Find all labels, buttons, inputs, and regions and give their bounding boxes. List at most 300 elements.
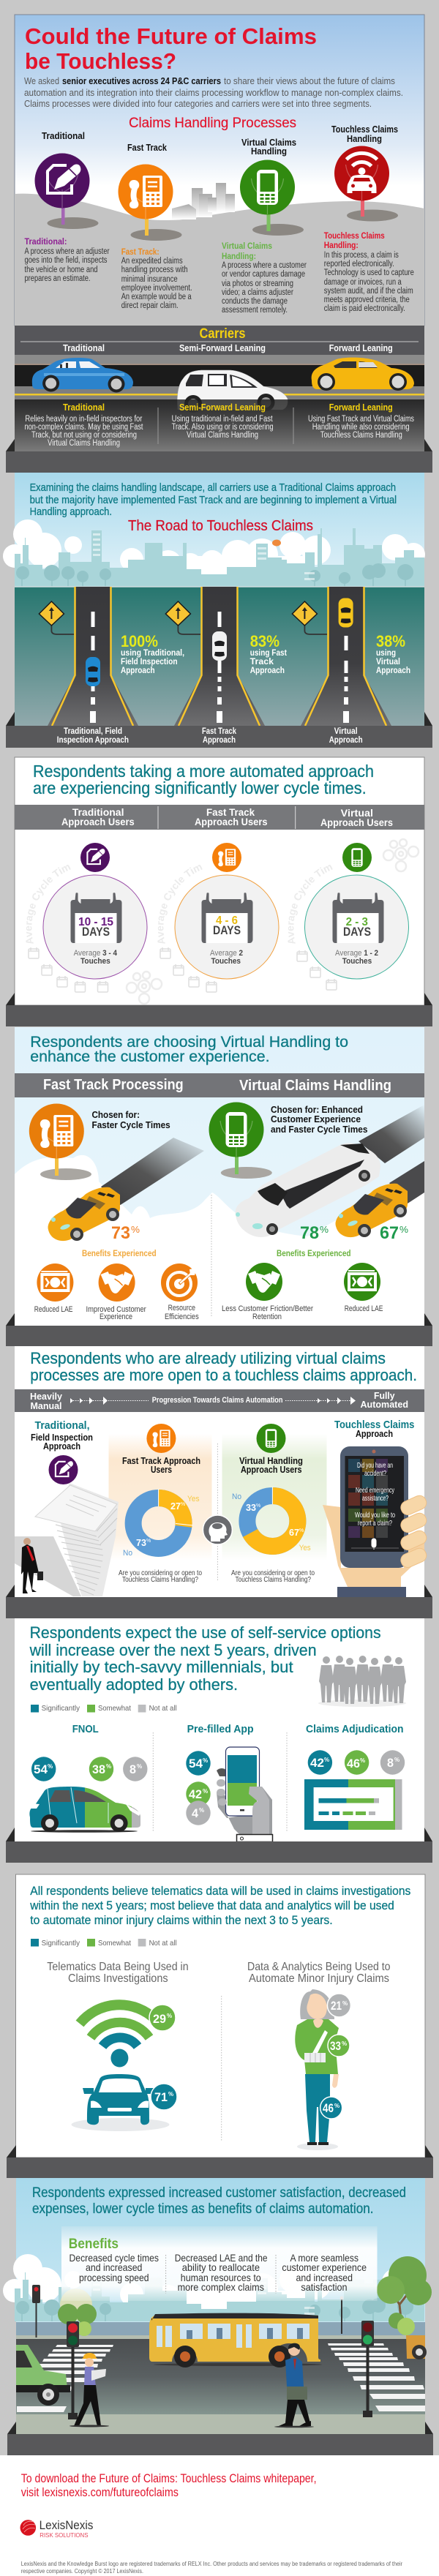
virtual users label: Virtual Handling [239,1455,303,1466]
donut: virtual: 33 [246,1502,256,1513]
definition: touchless claims handling: Technology is used to capture [324,269,414,277]
yellow vehicle right [406,2335,427,2359]
semi-forward leaning description: Semi-Forward Leaning [179,402,266,413]
panel: cycle times [15,756,424,1005]
icon: fast track [146,1424,176,1453]
process names: Fast Track [127,142,168,153]
road: fast track [101,1138,204,1205]
column header band: Traditional [72,806,124,818]
heading: open to touchless [30,1349,417,1384]
traditional carrier description: Virtual Claims Handling [48,439,120,448]
question: virtual [231,1569,315,1584]
stat: 100 percent: Field Inspection [121,656,178,666]
column: traditional users: Average 3 - 4 [74,949,118,958]
benefit column 3: customer experience [282,2261,367,2273]
process names: Handling [251,146,287,157]
heading: cycle times [33,762,374,797]
donut: virtual: No [232,1492,241,1501]
chart title: analytics [247,1961,391,1985]
FNOL car [28,1785,142,1833]
header band: Fast Track Processing [43,1077,184,1093]
carriers heading: Carriers [199,326,246,342]
benefit: reduced LAE [344,1263,383,1313]
yellow bus [149,2313,322,2367]
benefit column 3 [282,2252,367,2293]
footer background [0,2455,439,2576]
download call to action [21,2472,316,2499]
stat: 21 percent: % [342,2000,348,2007]
intro text: Claims processes were divided into four categories and carriers were set into three segments. [24,98,372,109]
touchless approach label: Touchless Claims [334,1419,414,1431]
legend: Not at all [149,1704,177,1713]
question: virtual: Are you considering or open to [231,1569,315,1577]
chosen for: fast track [92,1109,170,1130]
stat: 73 percent: % [131,1224,140,1235]
column: virtual users: 2 - 3 [346,916,368,928]
column header band [15,805,424,830]
shelf band 4 [6,1313,432,1346]
heading: cycle times: Respondents taking a more automated approach [33,762,374,781]
stat: 38 percent [376,632,410,675]
definition: fast track: Fast Track: [121,247,160,257]
definition: traditional: Traditional: [25,236,67,247]
intro text: automation and its integration into their claims processing workflow to manage non-complex claims. [24,87,403,98]
column header band: Fast Track [206,806,255,818]
pre-filled app stats: 42 [189,1787,202,1801]
forward leaning description [308,402,414,440]
column: virtual users: Average 1 - 2 [335,949,378,958]
stat: 71 percent [151,2084,177,2110]
pre-filled app stats: % [203,1757,208,1764]
carrier labels: Semi-Forward Leaning [179,342,266,353]
progression band [15,1389,424,1412]
paper stack [35,1483,119,1596]
definition: traditional: prepares an estimate. [25,274,91,283]
heading: customer experience: enhance the customer experience. [30,1048,270,1065]
definition: fast track: An expedited claims [121,257,183,266]
FNOL stats: 8 [130,1762,136,1776]
blue car top view [86,657,100,686]
yellow car top view [339,598,353,628]
icon: virtual [256,1424,285,1453]
road strip [15,355,424,399]
ground [15,587,424,726]
dotted divider [217,1443,218,1580]
panel: benefits street scene [3,2178,432,2434]
legend: Significantly [42,1939,80,1948]
FNOL stats: % [106,1763,111,1770]
chosen for: fast track: Faster Cycle Times [92,1119,170,1130]
semi-forward leaning description: Virtual Claims Handling [187,431,258,440]
sports car: fast track [48,1187,120,1241]
benefit column 3: satisfaction [301,2281,348,2293]
definition: traditional: the vehicle or home and [25,266,98,274]
shelf band 2 with road labels: Fast Track [202,727,236,736]
forward leaning description: Using Fast Track and Virtual Claims [308,415,414,424]
traditional label: Field Inspection [31,1432,93,1443]
pin: traditional [35,154,98,229]
logo: LexisNexis Risk Solutions [20,2518,93,2539]
download call to action: To download the Future of Claims: Touchless Claims whitepaper, [21,2472,316,2485]
signs [39,601,327,634]
column: fast track users: 4 - 6 [216,915,238,927]
shelf band 2 with road labels: Virtual [334,727,358,736]
intro paragraph [30,482,397,518]
benefits label: fast track: Benefits Experienced [82,1248,157,1258]
column titles [72,1723,403,1735]
stat: 33 percent [328,2035,350,2057]
claims adjudication stats: 46 [347,1757,360,1770]
title [25,23,317,74]
definition: fast track: minimal insurance [121,275,178,284]
stat: 83 percent: Track [250,656,274,666]
dotted divider [211,1195,212,1317]
stat: 46 percent: 46 [323,2101,334,2115]
stat: 33 percent: % [342,2040,347,2047]
column: traditional users: Touches [80,957,110,966]
column: fast track users: Touches [211,957,241,966]
claims adjudication stats: % [394,1757,399,1763]
question: fast track: Touchless Claims Handling? [122,1575,198,1584]
panel: self-service [15,1618,424,1842]
shelf band 2 with road labels: Approach [329,736,363,745]
traditional carrier description [25,402,143,448]
heading: open to touchless: Respondents who are already utilizing virtual claims [30,1349,386,1367]
road 1 [48,587,138,726]
decorative cycle-time labels [26,865,332,944]
heading: customer experience [30,1033,348,1065]
traditional carrier description: Traditional [63,402,105,413]
stat: 71 percent: 71 [154,2090,168,2104]
donut: fast track: 73 [136,1537,146,1548]
panel: claims handling processes [15,15,424,326]
touchless approach label: Approach [356,1428,393,1439]
white car top view [212,631,227,661]
icon: traditional [48,1455,78,1484]
pedestrian signal left [67,2321,79,2419]
heading: benefits: expenses, lower cycle times as benefits of claims automation. [32,2201,373,2217]
benefit: less customer friction [222,1263,313,1321]
definition: touchless claims handling: Handling: [324,240,359,250]
shelf band 2 with road labels: Inspection Approach [57,736,129,745]
stat: 67 percent [380,1223,408,1243]
chart title: telematics [47,1961,189,1985]
shelf band 8 [7,2422,433,2455]
stat: 46 percent: % [334,2103,339,2109]
stat: 67 percent: 67 [380,1223,399,1243]
stat: 38 percent: Approach [376,665,410,675]
pedestrian signal right [361,2321,374,2417]
progression band: Manual [31,1400,61,1411]
stat: 78 percent [300,1223,329,1243]
limousine [236,1143,380,1237]
donut: fast track: No [123,1549,132,1558]
column titles: Claims Adjudication [306,1723,404,1735]
benefit column 2: human resources to [181,2272,261,2283]
heading: telematics: within the next 5 years; most believe that data and analytics will be used [29,1899,394,1912]
definition: touchless claims handling [324,230,414,313]
heading: self-service: eventually adopted by others. [30,1675,238,1694]
small calendars and gears [29,839,419,1004]
sports car: virtual [336,1184,408,1237]
benefit: resource efficiencies: Resource [168,1304,195,1313]
pin: touchless claims handling [334,146,398,221]
definition: virtual claims handling: conducts the damage [222,297,288,306]
intro text: senior executives across 24 P&C carriers [62,75,221,86]
FNOL stats: % [137,1763,142,1770]
panel: open to touchless [15,1346,429,1597]
chart title: telematics: Telematics Data Being Used in [47,1961,189,1973]
benefit column 1: and increased [86,2261,142,2273]
title: Could the Future of Claims [25,23,317,49]
column header band: Approach Users [61,816,135,827]
definition: virtual claims handling: Virtual Claims [222,241,272,251]
shelf band 2 with road labels [6,712,432,748]
heading: self-service: initially by tech-savvy millennials, but [30,1658,293,1676]
semi-forward leaning description: Using traditional in-field and Fast [172,415,273,424]
legal text [21,2561,402,2575]
benefit: resource efficiencies: Efficiencies [165,1313,199,1321]
benefit column 2: more complex claims [178,2281,264,2293]
benefits title: Benefits [69,2237,119,2252]
FNOL stats: 54 [34,1762,48,1776]
pre-filled app stats: 4 [192,1806,199,1820]
hand holding phone: Need emergency [356,1486,394,1495]
forward leaning description: Handling while also considering [312,423,410,432]
clouds and city [3,2254,425,2321]
title: be Touchless? [25,48,176,74]
carrier descriptions panel [15,399,424,451]
distant buildings [172,183,235,219]
definition: touchless claims handling: reported electronically. [324,260,394,269]
heading: telematics: All respondents believe telematics data will be used in claims investigations [30,1885,410,1898]
intro paragraph: but the majority have implemented Fast Track and are beginning to implement a Virtual [30,495,397,506]
stat: 38 percent: using [376,647,396,658]
right tree [377,2256,432,2335]
pre-filled app stats: % [203,1788,208,1795]
legend [31,1704,177,1713]
businessman walking [274,2343,314,2427]
claims adjudication stats: 8 [387,1756,394,1770]
column: virtual users: DAYS [343,925,371,939]
clouds [3,519,425,577]
stat: 83 percent: Approach [250,665,285,675]
businessman [21,1538,43,1593]
pre-filled app phone and hand [217,1747,272,1842]
yellow sports car [312,358,414,391]
FNOL stats: 38 [92,1762,105,1776]
right crosswalk [328,2343,425,2411]
far traffic light and lamp post [32,2285,344,2337]
chart title: analytics: Data & Analytics Being Used to [247,1961,391,1973]
heading: customer experience: Respondents are choosing Virtual Handling to [30,1033,348,1051]
chosen for: virtual: and Faster Cycle Times [271,1124,367,1135]
definition: fast track: direct repair claim. [121,301,179,310]
benefit: less customer friction: Retention [252,1313,282,1321]
legend: Not at all [149,1939,177,1948]
donut: virtual: % [299,1528,304,1533]
benefit column 2: Decreased LAE and the [175,2252,268,2264]
column: virtual users [304,843,408,979]
heading: telematics: to automate minor injury claims within the next 3 to 5 years. [30,1914,333,1927]
stat: 21 percent: 21 [331,1999,342,2013]
clouds [15,1155,424,1326]
definition: virtual claims handling: assessment remotely. [222,306,288,315]
panel: carriers [15,326,424,451]
stat: 83 percent: 83% [250,632,279,650]
claims adjudication stats [308,1750,405,1775]
column: traditional users: 10 - 15 [78,916,113,928]
definition: fast track: employee involvement. [121,284,192,293]
definition: virtual claims handling: video; a claims adjuster [222,288,293,297]
benefit: resource efficiencies [161,1263,199,1321]
left tree [58,2288,97,2336]
definition: fast track: handling process with [121,266,188,274]
stat: 100 percent: using Traditional, [121,647,184,658]
definition: traditional [25,236,110,283]
donut: virtual [232,1487,311,1552]
stat: 73 percent [111,1223,140,1243]
fast track users label: Fast Track Approach [122,1455,200,1466]
traditional carrier description: Relies heavily on in-field inspectors for [25,415,143,424]
chosen for: virtual [271,1104,367,1135]
benefit: improved customer experience [86,1263,146,1321]
road 2 [174,587,265,726]
legend: Somewhat [98,1704,131,1713]
forward leaning description: Touchless Claims Handling [320,431,402,440]
stat: 29 percent: 29 [153,2012,166,2026]
definition: touchless claims handling: meets approved criteria, the [324,296,410,304]
white minivan [177,370,288,413]
hand holding phone: report a claim? [358,1519,392,1528]
claims adjudication stats: % [324,1757,329,1763]
stat: 100 percent: 100% [121,632,158,650]
definition: touchless claims handling: Touchless Claims [324,230,385,241]
silhouettes of people [318,1656,406,1707]
wifi and car [72,2005,170,2131]
intro paragraph: Handling approach. [30,506,112,518]
logo: LexisNexis Risk Solutions: LexisNexis [40,2518,93,2532]
pin: fast track [119,164,181,241]
shelf band 3 [6,993,432,1026]
benefit column 1 [69,2252,159,2283]
progression band: Progression Towards Claims Automation [152,1396,283,1405]
intro text: to share their views about the future of claims [224,75,395,86]
donut: fast track: Yes [187,1495,200,1503]
download call to action: visit lexisnexis.com/futureofclaims [21,2486,179,2499]
forward leaning description: Forward Leaning [329,402,393,413]
panel: telematics [16,1874,425,2158]
stat: 29 percent: % [167,2013,172,2019]
legend: Somewhat [98,1939,131,1948]
column titles: FNOL [72,1723,99,1735]
donut: fast track [123,1489,200,1558]
hand holding phone: assistance? [362,1494,389,1503]
shadow behind paper [15,1536,81,1596]
blue car [32,358,133,392]
benefit: reduced LAE: Reduced LAE [34,1305,73,1314]
stat: 29 percent [149,2005,176,2031]
definition: traditional: goes into the field, inspects [25,256,108,265]
column header band: Virtual [341,807,373,819]
process names: Handling [347,133,382,144]
heading: self-service [29,1623,381,1694]
shelf band 1 [6,439,432,473]
legal text: LexisNexis and the Knowledge Burst logo are registered trademarks of RELX Inc. Other products and services may be trademarks or registered trademarks of their [21,2561,402,2567]
column tint: virtual [222,1434,326,1561]
chosen for: fast track: Chosen for: [92,1109,140,1120]
stat: 100 percent [121,632,184,675]
claims adjudication form [304,1779,402,1830]
shelf band 5 [6,1585,432,1618]
stat: 33 percent: 33 [330,2039,341,2053]
definition: virtual claims handling: or vendor captures damage [222,270,305,279]
hand holding phone: accident? [364,1469,386,1478]
claims adjudication stats: % [360,1757,365,1764]
FNOL stats: % [48,1763,53,1770]
stat: 67 percent: % [399,1224,408,1235]
definition: virtual claims handling [222,241,307,315]
chart title: analytics: Automate Minor Injury Claims [249,1972,389,1985]
benefit column 3: A more seamless [290,2252,359,2264]
virtual users label [239,1455,303,1475]
pre-filled app stats: % [199,1807,204,1814]
heading: benefits [32,2185,406,2217]
carrier labels [63,342,393,353]
carrier labels: Traditional [63,342,105,353]
column tint: fast track [108,1434,212,1561]
stat: 83 percent [250,632,287,675]
chosen for: virtual: Chosen for: Enhanced [271,1104,363,1115]
donut: fast track: 27 [170,1501,181,1512]
legal text: respective companies. Copyright © 2017 LexisNexis. [21,2568,143,2575]
traditional carrier description: non-complex claims. May be using Fast [25,423,143,432]
road lower: virtual [389,1161,424,1203]
panel: road to touchless claims [3,473,425,726]
panel: customer experience [15,1027,424,1326]
traditional label [31,1419,93,1452]
definition: touchless claims handling: In this process, a claim is [324,251,399,260]
column: virtual users: Touches [342,957,372,966]
stat: 78 percent: 78 [300,1223,319,1243]
definition: traditional: A process where an adjuster [25,247,110,256]
process names: Traditional [42,130,85,141]
chart title: telematics: Claims Investigations [68,1972,168,1985]
stat: 46 percent [320,2097,342,2119]
progression band: Heavily [30,1391,63,1402]
icon: head with cloud [203,1515,232,1544]
stat: 71 percent: % [168,2091,173,2098]
stat: 38 percent: Virtual [376,656,400,666]
progression band: Automated [360,1399,408,1410]
heading: telematics [29,1885,410,1927]
benefit column 2 [175,2252,268,2293]
heading: road: The Road to Touchless Claims [128,518,313,534]
hand holding phone: Did you have an [357,1461,393,1470]
column header band: Approach Users [320,816,393,828]
heading: self-service: Respondents expect the use of self-service options [30,1623,381,1642]
woman with hard hat [70,2353,109,2427]
process names: Touchless Claims [331,124,398,135]
pre-filled app stats: 54 [189,1757,203,1770]
pre-filled app stats [186,1751,211,1825]
column: traditional users: DAYS [82,925,110,939]
shelf band 7 [7,2145,433,2178]
definition: virtual claims handling: via photos or streaming [222,279,293,288]
hand holding phone [323,1446,429,1597]
virtual users label: Approach Users [241,1464,301,1475]
donut: virtual: % [256,1503,260,1509]
